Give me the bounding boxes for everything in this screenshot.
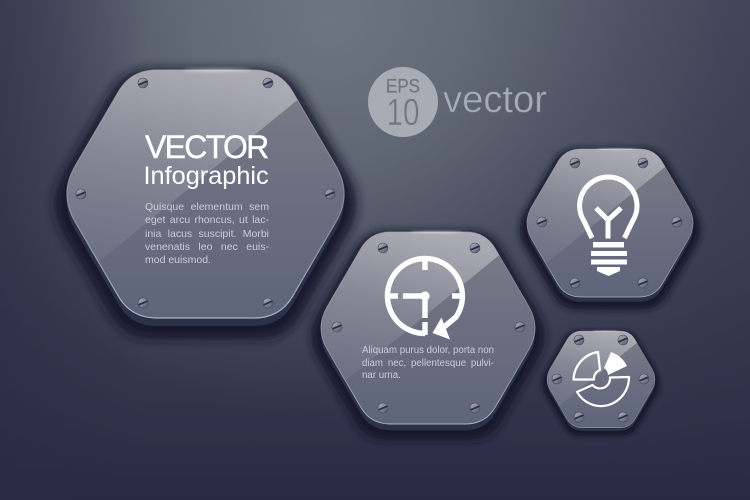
icon: lightbulb xyxy=(580,177,637,276)
text block: clock description: nar urna. xyxy=(362,370,401,381)
screws xyxy=(552,335,649,422)
panel: main hexagon xyxy=(55,60,357,339)
screws xyxy=(76,78,335,308)
text block: main description: mod euismod. xyxy=(145,254,211,266)
badge: EPS 10 vector xyxy=(368,67,547,137)
text block: main description: Quisque elementum sem xyxy=(145,201,269,213)
icon: pie chart xyxy=(574,352,629,406)
text block: main description: eget arcu rhoncus, ut lac- xyxy=(145,214,269,226)
screws xyxy=(537,158,682,288)
panel: pie chart hexagon xyxy=(542,327,660,436)
text block: main description: inia lacus suscipit. Morbi xyxy=(145,228,269,240)
text block: clock description: diam nec, pellentesque pulvi- xyxy=(362,358,494,369)
screws xyxy=(332,243,525,413)
text block: main description: venenatis leo nec euis- xyxy=(145,241,269,253)
badge circle: 10 xyxy=(386,92,420,134)
heading: VECTOR: VECTOR xyxy=(145,129,268,165)
subheading: Infographic: Infographic xyxy=(144,162,269,190)
panel: clock hexagon xyxy=(311,224,545,440)
badge circle: EPS xyxy=(386,76,420,98)
text block: clock description: Aliquam purus dolor, porta non xyxy=(362,345,494,356)
icon: clock with arrow xyxy=(387,259,462,340)
text block: main description xyxy=(145,201,269,271)
text block: clock description xyxy=(362,345,494,387)
vector wordmark: vector xyxy=(443,79,547,121)
badge circle xyxy=(368,67,438,137)
panel: lightbulb hexagon xyxy=(520,143,701,310)
